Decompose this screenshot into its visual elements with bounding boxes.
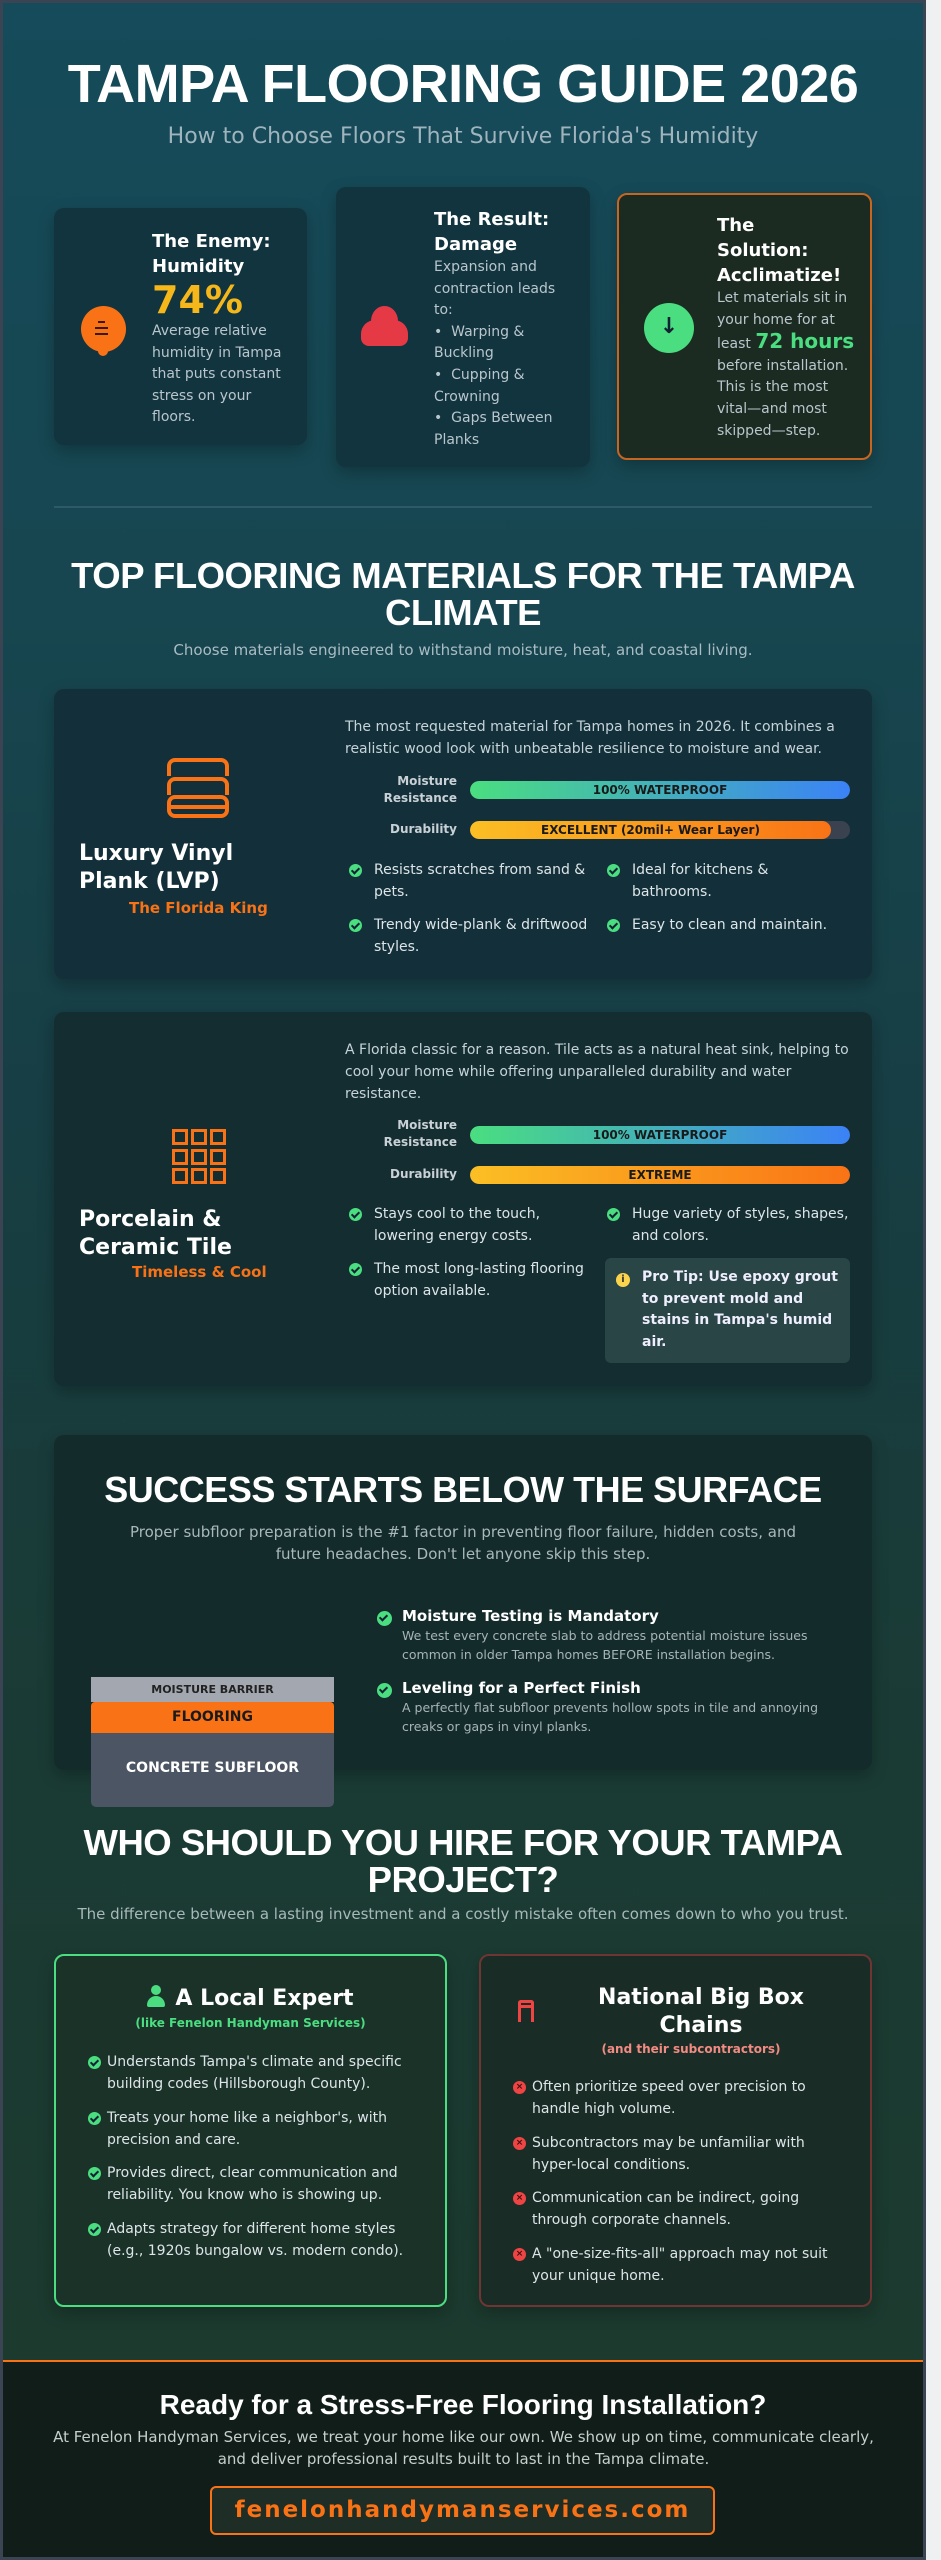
text: result: The Result: (434, 209, 549, 230)
title: LVP (79, 841, 233, 894)
panel: LVP: Trendy wide-plank & driftwood styles. (374, 917, 587, 955)
text: solution: Acclimatize! (717, 265, 841, 286)
subheading: materials: Choose materials engineered to withstand moisture, heat, and coastal living. (173, 641, 753, 659)
footer text: At Fenelon Handyman Services, we treat your home like our own. We show up on time, communicate clearly, and deliver professional results built to last in the Tampa climate. (53, 2428, 874, 2468)
icon: tile grid (172, 1129, 226, 1184)
text: result: • Gaps Between Planks (434, 410, 552, 448)
title: TAMPA FLOORING GUIDE 2026 (68, 54, 858, 114)
icon: green down arrow: ↓ (660, 314, 678, 339)
bar: moisture (384, 1118, 850, 1149)
bullets: LVP (349, 862, 827, 955)
panel: big box chains: Communication can be indirect, going through corporate channels. (532, 2190, 799, 2228)
text: enemy: Humidity (152, 256, 244, 277)
bar: durability (390, 1166, 850, 1184)
diagram: floor layers: MOISTURE BARRIER (151, 1683, 274, 1696)
text: solution: Solution: (717, 240, 808, 261)
diagram: floor layers: CONCRETE SUBFLOOR (126, 1760, 299, 1776)
callout: pro tip (605, 1258, 850, 1363)
title: tile (79, 1207, 232, 1260)
subheading: hire: The difference between a lasting investment and a costly mistake often comes down to who you trust. (77, 1905, 849, 1923)
heading: big box: National Big Box Chains (598, 1985, 804, 2038)
panel: tile: 100% WATERPROOF (593, 1128, 727, 1142)
text: solution: The (717, 215, 754, 236)
subtitle: florida king: The Florida King (129, 899, 268, 917)
callout: pro tip: i (621, 1274, 625, 1285)
text: enemy: Average relative humidity in Tampa that puts constant stress on your floors. (152, 323, 281, 425)
panel: tile: EXTREME (628, 1168, 692, 1182)
heading: top flooring materials: TOP FLOORING MATERIALS FOR THE TAMPA CLIMATE (71, 555, 855, 633)
icon: red blob (361, 306, 408, 346)
panel: tile: Huge variety of styles, shapes, and colors. (632, 1206, 848, 1244)
panel: tile: Durability (390, 1167, 457, 1181)
card: the result damage (336, 187, 590, 467)
panel: tile: Moisture (397, 1118, 457, 1132)
text: solution: Let materials sit in your home for at least 72 hours before installation. This is the most vital—and most skipped—step. (717, 290, 854, 439)
panel: local expert: Treats your home like a neighbor's, with precision and care. (107, 2110, 387, 2148)
description: The most requested material for Tampa homes in 2026. It combines a realistic wood look with unbeatable resilience to moisture and wear. (345, 719, 835, 757)
text: result: • Warping & Buckling (434, 324, 524, 361)
card: the solution acclimatize (617, 193, 872, 460)
subtitle: timeless: Timeless & Cool (132, 1263, 267, 1281)
icon: store (518, 2000, 534, 2022)
panel: subfloor: We test every concrete slab to address potential moisture issues common in older Tampa homes BEFORE installation begins. (402, 1628, 808, 1662)
text: solution (716, 215, 854, 439)
panel: big box chains (479, 1954, 872, 2307)
callout: pro tip: Pro Tip: Use epoxy grout to prevent mold and stains in Tampa's humid air. (642, 1269, 838, 1350)
panel: tile: Stays cool to the touch, lowering energy costs. (374, 1206, 540, 1244)
panel: big box chains: Often prioritize speed over precision to handle high volume. (532, 2079, 806, 2117)
text: result: Damage (434, 234, 517, 255)
title: LVP: Luxury Vinyl (79, 841, 233, 866)
bar: moisture (384, 774, 850, 805)
panel: local expert: Provides direct, clear communication and reliability. You know who is showing up. (107, 2165, 398, 2203)
text: enemy: 74% (152, 278, 243, 322)
diagram: floor layers: FLOORING (172, 1709, 253, 1725)
text: enemy (152, 231, 281, 425)
icon: speech bubble (81, 306, 126, 352)
bullets: tile (349, 1206, 848, 1299)
footer (3, 2360, 923, 2560)
panel: big box chains: Subcontractors may be unfamiliar with hyper-local conditions. (532, 2135, 805, 2173)
panel: LVP: Moisture (397, 774, 457, 788)
subtitle: How to Choose Floors That Survive Florida's Humidity (168, 124, 758, 149)
button: website: fenelonhandymanservices.com (235, 2497, 690, 2523)
panel: LVP: Easy to clean and maintain. (632, 917, 827, 933)
sub: like fenelon: (like Fenelon Handyman Services) (135, 2016, 366, 2030)
panel: big box chains: × (516, 2138, 523, 2148)
text: enemy: The Enemy: (152, 231, 271, 252)
panel: subfloor: A perfectly flat subfloor prevents hollow spots in tile and annoying creaks or gaps in vinyl planks. (402, 1700, 818, 1734)
card: the enemy humidity (54, 208, 307, 445)
text: result: • Cupping & Crowning (434, 367, 525, 405)
heading: who should you hire: WHO SHOULD YOU HIRE FOR YOUR TAMPA PROJECT? (84, 1822, 842, 1900)
icon: planks (167, 758, 229, 818)
diagram: floor layers (91, 1677, 334, 1807)
panel: big box chains: × (516, 2249, 523, 2259)
panel: local expert: Understands Tampa's climate and specific building codes (Hillsborough County). (107, 2054, 402, 2092)
list: local pros (88, 2054, 403, 2259)
description: A Florida classic for a reason. Tile acts as a natural heat sink, helping to cool your home while offering unparalleled durability and water resistance. (345, 1042, 849, 1102)
title: LVP: Plank (LVP) (79, 869, 220, 894)
panel: big box chains: × (516, 2193, 523, 2203)
check: leveling (377, 1679, 818, 1734)
footer heading: Ready for a Stress-Free Flooring Installation? (160, 2389, 766, 2420)
title: tile: Porcelain & (79, 1207, 221, 1232)
panel: subfloor: Moisture Testing is Mandatory (402, 1607, 659, 1625)
panel: local expert: Adapts strategy for different home styles (e.g., 1920s bungalow vs. modern condo). (107, 2221, 403, 2259)
button: website (210, 2486, 715, 2535)
panel: LVP: Resists scratches from sand & pets. (374, 862, 585, 900)
panel: LVP: Resistance (384, 791, 457, 805)
panel: tile: The most long-lasting flooring option available. (374, 1261, 584, 1299)
sub: subcontractors: (and their subcontractors) (601, 2042, 781, 2056)
title: tile: Ceramic Tile (79, 1235, 232, 1260)
heading: local expert: A Local Expert (175, 1986, 354, 2011)
text: result: Expansion and contraction leads to: (434, 259, 555, 318)
panel: tile: Resistance (384, 1135, 457, 1149)
icon: green down arrow (644, 303, 694, 353)
bar: durability (390, 821, 850, 839)
heading: success: SUCCESS STARTS BELOW THE SURFACE (104, 1469, 822, 1510)
panel: LVP: EXCELLENT (20mil+ Wear Layer) (541, 823, 760, 837)
panel: local expert (54, 1954, 447, 2307)
check: moisture testing (377, 1607, 808, 1662)
list: big box cons (513, 2079, 828, 2284)
panel: LVP: 100% WATERPROOF (593, 783, 727, 797)
subheading: Proper subfloor preparation is the #1 factor in preventing floor failure, hidden costs, and future headaches. Don't let anyone skip this step. (130, 1523, 796, 1563)
panel: subfloor (54, 1435, 872, 1770)
panel: big box chains: × (516, 2082, 523, 2092)
panel: subfloor: Leveling for a Perfect Finish (402, 1679, 641, 1697)
panel: big box chains: A "one-size-fits-all" approach may not suit your unique home. (532, 2246, 828, 2284)
panel: LVP: Durability (390, 822, 457, 836)
panel: LVP (54, 689, 872, 979)
text: result (434, 209, 555, 448)
panel: tile (54, 1012, 872, 1386)
panel: LVP: Ideal for kitchens & bathrooms. (632, 862, 768, 900)
